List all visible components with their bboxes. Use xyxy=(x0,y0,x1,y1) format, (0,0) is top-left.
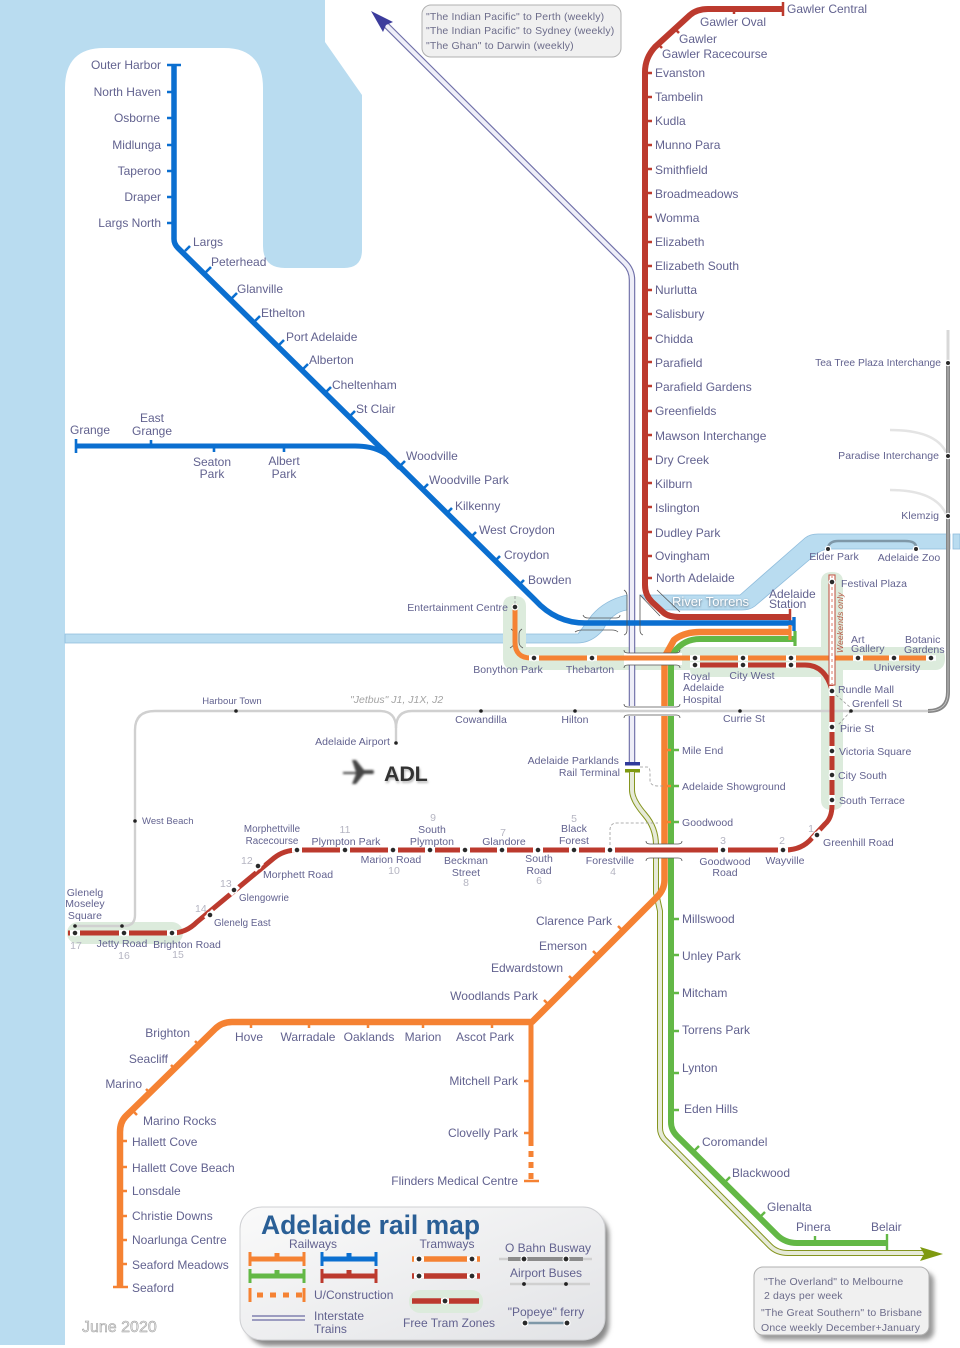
labels: Outer Harbor and Grange lines: Park xyxy=(200,467,225,481)
labels: city tram: Royal xyxy=(683,671,710,683)
labels: Glenelg tram line: Glenelg xyxy=(67,887,103,899)
labels: Outer Harbor and Grange lines: Largs xyxy=(193,235,223,249)
labels: Belair line: Coromandel xyxy=(702,1135,767,1149)
labels: parklands terminal and Adelaide line stations: Rail Terminal xyxy=(559,767,620,779)
labels: Glenelg tram line: Goodwood xyxy=(699,856,751,868)
labels: Gawler line: Parafield Gardens xyxy=(655,380,752,394)
labels: Noarlunga and Tonsley lines: Edwardstown xyxy=(491,961,563,975)
labels: O-Bahn and airport bus: "Jetbus" J1, J1X, J2 xyxy=(350,694,443,706)
icon: airport plane and ADL code: ADL xyxy=(385,764,429,788)
labels: city tram: Bonython Park xyxy=(473,664,543,676)
labels: O-Bahn and airport bus: Hilton xyxy=(561,714,589,726)
labels: Belair line: Blackwood xyxy=(732,1166,790,1180)
labels: Glenelg tram line: 10 xyxy=(388,865,400,877)
labels: Outer Harbor and Grange lines: Midlunga xyxy=(112,138,161,152)
labels: Glenelg tram line: Marion Road xyxy=(361,854,421,866)
labels: Outer Harbor and Grange lines: Seaton xyxy=(193,455,231,469)
labels: Outer Harbor and Grange lines: Port Adelaide xyxy=(286,330,358,344)
weekend tram extension: Weekends only xyxy=(835,592,845,653)
labels: Noarlunga and Tonsley lines: Oaklands xyxy=(344,1030,394,1044)
labels: Glenelg tram line: 13 xyxy=(220,878,232,890)
labels: Gawler line: Elizabeth South xyxy=(655,259,739,273)
interstate railway lines xyxy=(371,11,943,1261)
labels: Gawler line: Smithfield xyxy=(655,163,708,177)
labels: parklands terminal and Adelaide line stations xyxy=(528,745,786,829)
labels: Glenelg tram line: South xyxy=(418,824,446,836)
labels: Gawler line: Gawler Racecourse xyxy=(662,47,768,61)
labels: Gawler line: Dudley Park xyxy=(655,526,721,540)
labels: O-Bahn and airport bus: Cowandilla xyxy=(455,714,507,726)
legend panel xyxy=(240,1207,609,1346)
labels: Noarlunga and Tonsley lines: Lonsdale xyxy=(132,1184,181,1198)
labels: Outer Harbor and Grange lines xyxy=(70,58,571,587)
labels: Outer Harbor and Grange lines: Cheltenham xyxy=(332,378,397,392)
labels: Gawler line: Tambelin xyxy=(655,90,703,104)
labels: Noarlunga and Tonsley lines xyxy=(105,914,613,1295)
labels: Noarlunga and Tonsley lines: Noarlunga Centre xyxy=(132,1233,227,1247)
labels: city tram: Thebarton xyxy=(566,664,614,676)
red Gawler line xyxy=(645,2,790,624)
labels: Noarlunga and Tonsley lines: Seaford Meadows xyxy=(132,1258,229,1272)
labels: Outer Harbor and Grange lines: Ethelton xyxy=(261,306,305,320)
labels: Belair line xyxy=(682,912,902,1234)
labels: Glenelg tram line: Plympton xyxy=(410,836,454,848)
labels: Glenelg tram line: Brighton Road xyxy=(153,939,221,951)
labels: Glenelg tram line: Glandore xyxy=(482,836,526,848)
legend: buses and ferry: O Bahn Busway xyxy=(505,1241,591,1255)
labels: Noarlunga and Tonsley lines: Marion xyxy=(405,1030,441,1044)
callout: interstate trains to the north xyxy=(422,5,621,57)
labels: O-Bahn and airport bus: Tea Tree Plaza Interchange xyxy=(815,358,941,369)
labels: Glenelg tram line: South xyxy=(525,853,553,865)
River Torrens: River Torrens xyxy=(672,595,750,610)
labels: Glenelg tram line: Forestville xyxy=(586,855,634,867)
labels: Glenelg tram line: Road xyxy=(712,867,738,879)
labels: Glenelg tram line: Glenelg East xyxy=(214,918,271,929)
labels: city tram: City South xyxy=(838,770,887,782)
labels: Outer Harbor and Grange lines: Taperoo xyxy=(118,164,161,178)
bridge crossings xyxy=(510,590,690,861)
labels: city tram: Pirie St xyxy=(840,723,874,735)
callout: interstate trains to the north: "The Indian Pacific" to Perth (weekly) xyxy=(426,11,604,23)
blue Outer Harbor and Grange lines xyxy=(76,65,794,631)
labels: Outer Harbor and Grange lines: Woodville xyxy=(406,449,458,463)
labels: Glenelg tram line: 4 xyxy=(610,866,616,878)
labels: parklands terminal and Adelaide line stations: Adelaide Showground xyxy=(682,781,786,793)
title: Adelaide rail map xyxy=(261,1210,480,1240)
legend: tramways xyxy=(403,1237,495,1330)
labels: Gawler line: Ovingham xyxy=(655,549,710,563)
labels: Noarlunga and Tonsley lines: Hallett Cove xyxy=(132,1135,198,1149)
labels: Noarlunga and Tonsley lines: Flinders Medical Centre xyxy=(391,1174,518,1188)
labels: Gawler line: Greenfields xyxy=(655,404,716,418)
labels: Glenelg tram line: 15 xyxy=(172,949,184,961)
labels: parklands terminal and Adelaide line stations: Mile End xyxy=(682,745,723,757)
labels: O-Bahn and airport bus: Currie St xyxy=(723,713,765,725)
labels: Outer Harbor and Grange lines: Kilkenny xyxy=(455,499,500,513)
labels: Glenelg tram line: 11 xyxy=(340,824,351,836)
labels: Outer Harbor and Grange lines: Glanville xyxy=(237,282,283,296)
labels: Gawler line: Islington xyxy=(655,501,700,515)
labels: Glenelg tram line: 9 xyxy=(430,812,436,824)
labels: Glenelg tram line: Forest xyxy=(559,835,589,847)
River Torrens: River Torrens xyxy=(672,594,750,609)
labels: Outer Harbor and Grange lines: Alberton xyxy=(309,353,354,367)
legend: buses and ferry: Airport Buses xyxy=(510,1266,582,1280)
labels: O-Bahn and airport bus xyxy=(142,358,941,827)
labels: Gawler line: Adelaide xyxy=(769,587,816,601)
labels: Gawler line: Munno Para xyxy=(655,138,721,152)
labels: parklands terminal and Adelaide line stations: Goodwood xyxy=(682,817,733,829)
date stamp: June 2020 xyxy=(82,1319,157,1336)
labels: Gawler line: Mawson Interchange xyxy=(655,429,767,443)
labels: Glenelg tram line: 2 xyxy=(779,835,785,847)
legend: railways: Interstate xyxy=(314,1309,364,1323)
labels: Noarlunga and Tonsley lines: Clarence Park xyxy=(536,914,613,928)
labels: Gawler line: Nurlutta xyxy=(655,283,697,297)
labels: city tram: Hospital xyxy=(683,694,721,706)
labels: Gawler line: Kilburn xyxy=(655,477,692,491)
labels: Glenelg tram line: 1 xyxy=(808,823,814,835)
labels: city tram: Victoria Square xyxy=(839,746,911,758)
labels: Glenelg tram line: 5 xyxy=(571,813,577,825)
callout: interstate trains to the east: 2 days per week xyxy=(764,1290,843,1302)
labels: Gawler line: Chidda xyxy=(655,332,693,346)
labels: city tram: Art xyxy=(851,634,865,646)
labels: Gawler line: Broadmeadows xyxy=(655,187,738,201)
callout: interstate trains to the east xyxy=(754,1267,934,1340)
labels: Glenelg tram line: Morphett Road xyxy=(263,869,333,881)
labels: Noarlunga and Tonsley lines: Marino xyxy=(105,1077,142,1091)
labels: city tram: Entertainment Centre xyxy=(407,602,508,614)
labels: Noarlunga and Tonsley lines: Hove xyxy=(235,1030,263,1044)
labels: Gawler line: Dry Creek xyxy=(655,453,710,467)
labels: Glenelg tram line: Street xyxy=(452,867,480,879)
labels: city tram: Gardens xyxy=(904,644,945,656)
labels: Outer Harbor and Grange lines: Park xyxy=(272,467,297,481)
labels: city tram: South Terrace xyxy=(839,795,905,807)
labels: Outer Harbor and Grange lines: West Croydon xyxy=(479,523,555,537)
labels: Glenelg tram line: 7 xyxy=(500,827,506,839)
labels: Noarlunga and Tonsley lines: Warradale xyxy=(281,1030,336,1044)
labels: Glenelg tram line: 3 xyxy=(720,835,726,847)
labels: city tram: Grenfell St xyxy=(852,698,902,710)
labels: Noarlunga and Tonsley lines: Emerson xyxy=(539,939,587,953)
callout: interstate trains to the north: "The Indian Pacific" to Sydney (weekly) xyxy=(426,25,614,37)
labels: Outer Harbor and Grange lines: East xyxy=(140,411,165,425)
labels: Glenelg tram line: 17 xyxy=(70,940,82,952)
labels: Belair line: Eden Hills xyxy=(684,1102,738,1116)
labels: Gawler line: Evanston xyxy=(655,66,705,80)
legend: tramways: Free Tram Zones xyxy=(403,1316,495,1330)
labels: Glenelg tram line: 16 xyxy=(118,950,130,962)
labels: Glenelg tram line: Morphettville xyxy=(244,824,301,835)
River Torrens xyxy=(65,534,960,643)
labels: Noarlunga and Tonsley lines: Clovelly Park xyxy=(448,1126,519,1140)
coastline and sea xyxy=(0,0,362,1345)
labels: Belair line: Mitcham xyxy=(682,986,727,1000)
labels: city tram: City West xyxy=(729,670,775,682)
labels: Outer Harbor and Grange lines: Draper xyxy=(124,190,161,204)
icon: airport plane and ADL code: ADL xyxy=(384,762,428,786)
labels: Gawler line: Salisbury xyxy=(655,307,704,321)
legend: railways xyxy=(250,1237,393,1336)
labels: Outer Harbor and Grange lines: Grange xyxy=(132,424,172,438)
labels: Glenelg tram line: 12 xyxy=(241,855,253,867)
labels: Belair line: Pinera xyxy=(796,1220,831,1234)
labels: Noarlunga and Tonsley lines: Ascot Park xyxy=(456,1030,515,1044)
gaps around tram stops xyxy=(70,658,936,933)
labels: Glenelg tram line: Glengowrie xyxy=(239,893,290,904)
free tram zones xyxy=(67,572,945,944)
labels: Glenelg tram line: Beckman xyxy=(444,855,488,867)
green Belair line xyxy=(671,631,887,1250)
labels: O-Bahn and airport bus: Klemzig xyxy=(901,510,939,522)
labels: Gawler line: Womma xyxy=(655,211,700,225)
labels: Outer Harbor and Grange lines: Croydon xyxy=(504,548,549,562)
labels: O-Bahn and airport bus: Harbour Town xyxy=(202,696,262,707)
labels: city tram: Adelaide xyxy=(683,682,724,694)
callout: interstate trains to the east: "The Overland" to Melbourne xyxy=(764,1276,903,1288)
labels: Glenelg tram line: Wayville xyxy=(765,855,805,867)
orange tram line xyxy=(515,604,935,658)
legend: railways: U/Construction xyxy=(314,1288,393,1302)
weekend tram extension xyxy=(829,575,845,685)
labels: Glenelg tram line: Plympton Park xyxy=(312,836,381,848)
labels: Belair line: Torrens Park xyxy=(682,1023,751,1037)
labels: Glenelg tram line: 6 xyxy=(536,875,542,887)
labels: Gawler line: Gawler Oval xyxy=(700,15,766,29)
labels: city tram: Botanic xyxy=(905,634,940,646)
labels: Noarlunga and Tonsley lines: Marino Rocks xyxy=(143,1114,216,1128)
labels: Glenelg tram line: Moseley xyxy=(65,898,105,910)
legend: buses and ferry: "Popeye" ferry xyxy=(508,1305,584,1319)
labels: Glenelg tram line: Racecourse xyxy=(246,836,299,847)
labels: Gawler line: Kudla xyxy=(655,114,686,128)
labels: Gawler line: Elizabeth xyxy=(655,235,704,249)
labels: Gawler line: Station xyxy=(769,597,806,611)
labels: city tram: University xyxy=(874,662,921,674)
labels: Outer Harbor and Grange lines: Outer Harbor xyxy=(91,58,161,72)
labels: Noarlunga and Tonsley lines: Christie Downs xyxy=(132,1209,213,1223)
labels: Belair line: Belair xyxy=(871,1220,902,1234)
labels: Glenelg tram line: Road xyxy=(526,865,552,877)
labels: Gawler line: North Adelaide xyxy=(656,571,735,585)
labels: Belair line: Unley Park xyxy=(682,949,742,963)
labels: Noarlunga and Tonsley lines: Seaford xyxy=(132,1281,174,1295)
labels: Gawler line: Gawler Central xyxy=(787,2,867,16)
labels: Glenelg tram line: Square xyxy=(68,910,102,922)
labels: Outer Harbor and Grange lines: Peterhead xyxy=(211,255,266,269)
legend: railways: Trains xyxy=(314,1322,347,1336)
labels: O-Bahn and airport bus: Paradise Interchange xyxy=(838,450,939,462)
labels: O-Bahn and airport bus: Elder Park xyxy=(809,551,859,563)
bus stops xyxy=(73,709,853,928)
callout: interstate trains to the east: Once weekly December+January xyxy=(761,1322,921,1334)
labels: O-Bahn and airport bus: West Beach xyxy=(142,816,194,827)
labels: Noarlunga and Tonsley lines: Woodlands Park xyxy=(450,989,539,1003)
labels: city tram: Festival Plaza xyxy=(841,578,907,590)
labels: Gawler line: Gawler xyxy=(679,32,717,46)
labels: Noarlunga and Tonsley lines: Brighton xyxy=(145,1026,190,1040)
labels: Belair line: Millswood xyxy=(682,912,735,926)
labels: Glenelg tram line: 8 xyxy=(463,877,469,889)
labels: Noarlunga and Tonsley lines: Hallett Cove Beach xyxy=(132,1161,235,1175)
labels: Glenelg tram line: Black xyxy=(561,823,588,835)
labels: city tram: Greenhill Road xyxy=(823,837,894,849)
stations xyxy=(72,360,951,936)
labels: Outer Harbor and Grange lines: North Haven xyxy=(94,85,161,99)
labels: Gawler line xyxy=(655,2,867,611)
labels: Outer Harbor and Grange lines: Woodville Park xyxy=(429,473,510,487)
labels: Glenelg tram line: Jetty Road xyxy=(97,938,147,950)
labels: Outer Harbor and Grange lines: Albert xyxy=(268,454,300,468)
callout: interstate trains to the east: "The Great Southern" to Brisbane xyxy=(761,1307,922,1319)
labels: Noarlunga and Tonsley lines: Mitchell Park xyxy=(449,1074,519,1088)
icon: airport plane and ADL code xyxy=(343,760,429,788)
labels: city tram: Rundle Mall xyxy=(838,684,894,696)
legend: tramways: Tramways xyxy=(420,1237,474,1251)
dashed connectors xyxy=(515,596,851,850)
red tram line Glenelg to Festival Plaza xyxy=(68,665,832,933)
labels: city tram xyxy=(407,578,945,849)
labels: Glenelg tram line: 14 xyxy=(195,903,207,915)
labels: parklands terminal and Adelaide line stations: Adelaide Parklands xyxy=(528,755,619,767)
labels: Outer Harbor and Grange lines: St Clair xyxy=(356,402,395,416)
labels: Glenelg tram line xyxy=(65,812,814,962)
labels: Belair line: Lynton xyxy=(682,1061,718,1075)
labels: city tram: Gallery xyxy=(851,643,885,655)
labels: Outer Harbor and Grange lines: Largs North xyxy=(98,216,161,230)
airport bus and O-Bahn busway xyxy=(75,330,948,926)
labels: Outer Harbor and Grange lines: Osborne xyxy=(114,111,160,125)
callout: interstate trains to the north: "The Ghan" to Darwin (weekly) xyxy=(426,40,574,52)
labels: Noarlunga and Tonsley lines: Seacliff xyxy=(129,1052,169,1066)
labels: Gawler line: Parafield xyxy=(655,356,702,370)
orange Noarlunga and Tonsley lines xyxy=(113,625,790,1287)
labels: Outer Harbor and Grange lines: Bowden xyxy=(528,573,571,587)
legend: buses and ferry xyxy=(499,1241,592,1326)
legend: railways: Railways xyxy=(289,1237,337,1251)
labels: O-Bahn and airport bus: Adelaide Zoo xyxy=(878,552,940,564)
labels: Belair line: Glenalta xyxy=(767,1200,812,1214)
labels: Outer Harbor and Grange lines: Grange xyxy=(70,423,110,437)
labels: O-Bahn and airport bus: Adelaide Airport xyxy=(315,736,390,748)
